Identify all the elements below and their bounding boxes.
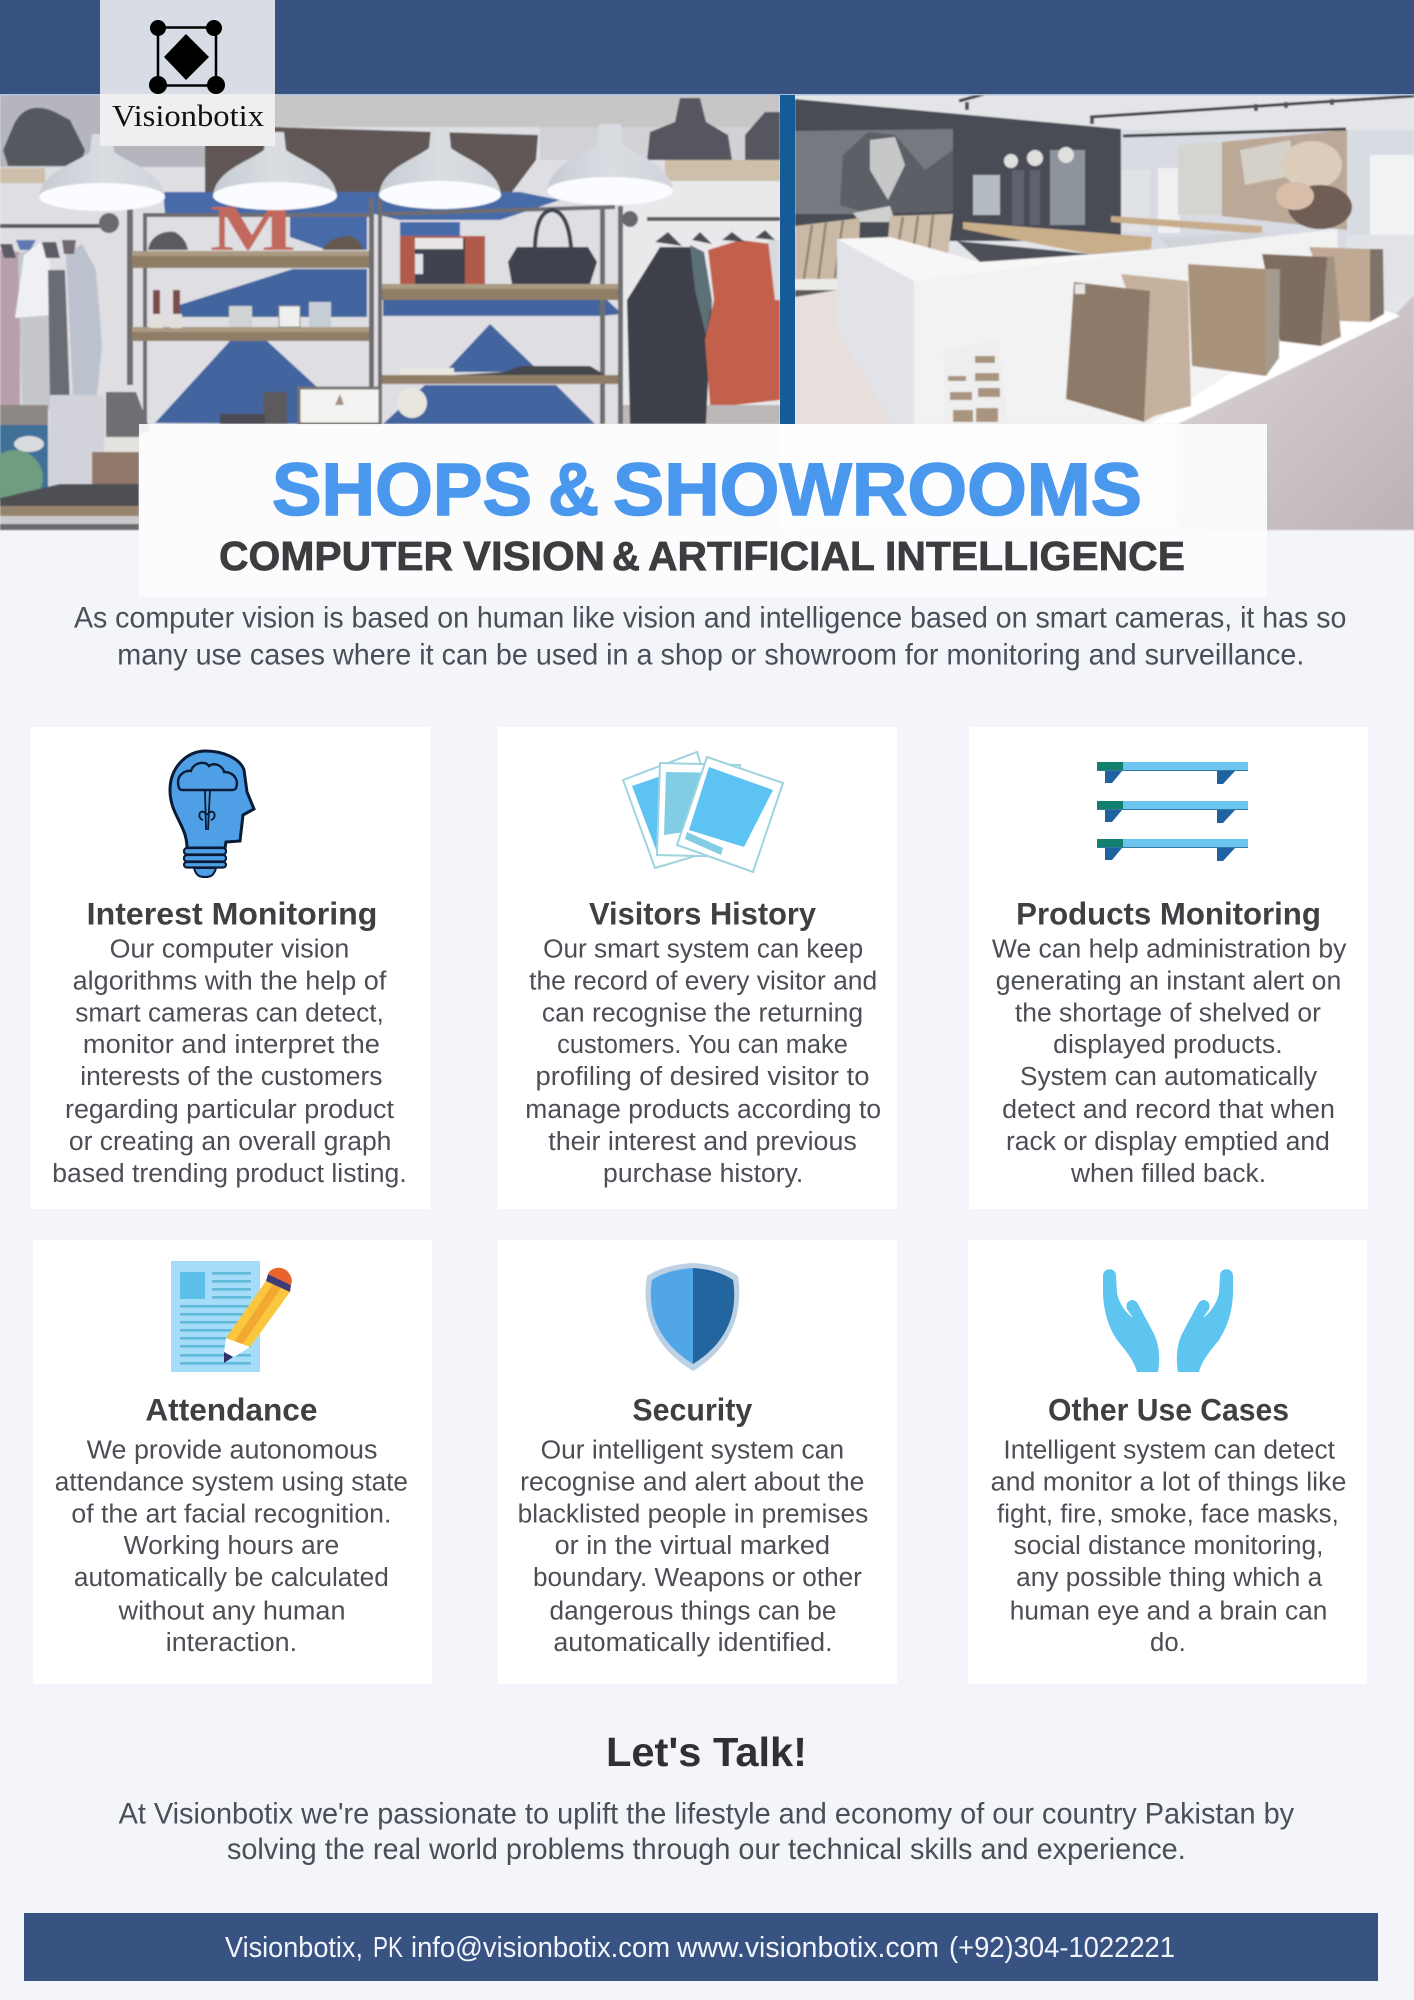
body text: any possible thing which a <box>1016 1562 1323 1592</box>
body text <box>55 1435 408 1657</box>
tables <box>957 241 1152 262</box>
body text: do. <box>1150 1627 1186 1657</box>
body text: their interest and previous <box>548 1126 857 1156</box>
intro text <box>74 601 1346 671</box>
body text: social distance monitoring, <box>1014 1530 1323 1560</box>
body text: the shortage of shelved or <box>1015 997 1321 1027</box>
body text: Our smart system can keep <box>543 934 863 964</box>
body text: monitor and interpret the <box>83 1029 380 1059</box>
contact details: www.visionbotix.com <box>676 1932 939 1964</box>
body text <box>518 1435 868 1657</box>
pendant lamps <box>39 124 673 197</box>
rail and coats right <box>647 217 780 221</box>
body text: dangerous things can be <box>550 1595 836 1625</box>
sign board <box>943 339 1008 422</box>
divider bar <box>780 95 795 424</box>
body text <box>525 934 881 1188</box>
subtitle: VISION <box>463 533 605 579</box>
white counter <box>837 239 914 424</box>
body text: interaction. <box>166 1627 297 1657</box>
panel: other use cases <box>968 1240 1367 1684</box>
heading: let's talk: Let's Talk! <box>606 1729 807 1775</box>
icon: open hands <box>1103 1269 1233 1372</box>
logo icon: diamond in frame <box>149 20 225 94</box>
bottles and objects <box>150 314 163 328</box>
subtitle <box>219 533 1185 579</box>
subtitle: ARTIFICIAL <box>648 533 875 579</box>
body text: purchase history. <box>603 1158 803 1188</box>
body text: Intelligent system can detect <box>1003 1435 1336 1465</box>
contact details: Visionbotix, <box>225 1932 363 1964</box>
bags and shelf on the top ledge <box>3 108 85 166</box>
contact details: PK <box>373 1932 404 1964</box>
icon: head light bulb <box>170 751 254 877</box>
wood sample racks behind counter <box>795 218 860 290</box>
icon: shield <box>646 1263 739 1371</box>
body text: Working hours are <box>124 1530 339 1560</box>
body text: smart cameras can detect, <box>75 997 384 1027</box>
body text: human eye and a brain can <box>1010 1595 1327 1625</box>
body text: interests of the customers <box>80 1061 382 1091</box>
body text: or creating an overall graph <box>69 1126 391 1156</box>
body text: recognise and alert about the <box>520 1466 864 1496</box>
body text: algorithms with the help of <box>73 965 387 995</box>
red duffel bag <box>400 236 485 284</box>
title <box>272 448 1142 531</box>
rail and hanging garments left <box>0 224 100 228</box>
panel: security <box>498 1240 897 1684</box>
panel: visitors history <box>498 727 897 1209</box>
icon: shelves <box>1097 762 1248 861</box>
contact details: info@visionbotix.com <box>411 1932 670 1964</box>
shelving frame <box>127 198 623 424</box>
decorative photo top edge <box>0 94 1414 96</box>
wood sample panels <box>1309 247 1370 322</box>
icon: document and pencil <box>171 1261 292 1372</box>
panel: attendance <box>33 1240 432 1684</box>
body text <box>52 934 407 1188</box>
title: SHOPS <box>272 448 532 531</box>
heading: Products Monitoring <box>1016 896 1321 931</box>
footer contact bar <box>24 1913 1378 1981</box>
logo wordmark: Visionbotix <box>112 98 265 133</box>
body text: generating an instant alert on <box>996 965 1341 995</box>
heading: Security <box>632 1392 753 1427</box>
body text: automatically be calculated <box>74 1562 389 1592</box>
body text: can recognise the returning <box>542 997 863 1027</box>
title: SHOWROOMS <box>613 448 1142 531</box>
heading: Other Use Cases <box>1048 1392 1289 1427</box>
body text: System can automatically <box>1020 1061 1318 1091</box>
letter M display: M <box>210 192 296 265</box>
body text <box>991 1435 1346 1657</box>
photo: flooring showroom <box>795 94 1414 530</box>
body text: attendance system using state <box>55 1466 408 1496</box>
intro text: As computer vision is based on human like vision and intelligence based on smart cameras, it has so <box>74 601 1346 634</box>
body text: customers. You can make <box>557 1029 848 1059</box>
body text: the record of every visitor and <box>529 965 877 995</box>
body text: Our computer vision <box>110 934 349 964</box>
panel: products monitoring <box>969 727 1368 1209</box>
body text: displayed products. <box>1053 1029 1283 1059</box>
heading: Interest Monitoring <box>87 896 377 931</box>
body text: based trending product listing. <box>52 1158 407 1188</box>
body text: We can help administration by <box>992 934 1347 964</box>
subtitle: INTELLIGENCE <box>885 533 1185 579</box>
photo: clothing shop <box>0 95 780 530</box>
heading: Visitors History <box>589 896 817 931</box>
body text: rack or display emptied and <box>1006 1126 1330 1156</box>
closing text <box>119 1797 1294 1866</box>
closing text: At Visionbotix we're passionate to uplift the lifestyle and economy of our country Pakistan by <box>119 1797 1294 1830</box>
title: & <box>548 448 599 531</box>
closing text: solving the real world problems through our technical skills and experience. <box>227 1833 1186 1866</box>
subtitle: COMPUTER <box>219 533 453 579</box>
icon: photo prints <box>623 752 783 872</box>
blue wall graphics <box>163 192 560 220</box>
top banner <box>0 0 1414 94</box>
panel: interest monitoring <box>30 727 430 1209</box>
body text: without any human <box>118 1595 346 1625</box>
body text: boundary. Weapons or other <box>533 1562 862 1592</box>
body text: or in the virtual marked <box>555 1530 830 1560</box>
body text: when filled back. <box>1070 1158 1266 1188</box>
body text: manage products according to <box>525 1094 881 1124</box>
logo <box>100 0 275 146</box>
body text: We provide autonomous <box>87 1435 377 1465</box>
body text: of the art facial recognition. <box>71 1498 391 1528</box>
subtitle: & <box>612 533 640 579</box>
body text: blacklisted people in premises <box>518 1498 868 1528</box>
heading: Attendance <box>145 1392 317 1427</box>
body text: profiling of desired visitor to <box>535 1061 870 1091</box>
body text: regarding particular product <box>65 1094 395 1124</box>
title backing panel <box>139 424 1267 597</box>
body text: fight, fire, smoke, face masks, <box>997 1498 1339 1528</box>
body text: detect and record that when <box>1002 1094 1335 1124</box>
body text <box>992 934 1347 1188</box>
body text: automatically identified. <box>553 1627 833 1657</box>
intro text: many use cases where it can be used in a shop or showroom for monitoring and surveillance. <box>117 638 1304 671</box>
floor <box>1177 295 1414 530</box>
contact details: (+92)304-1022221 <box>949 1932 1175 1964</box>
contact details <box>225 1932 1175 1964</box>
dark handbag <box>508 247 597 284</box>
body text: and monitor a lot of things like <box>991 1466 1346 1496</box>
body text: Our intelligent system can <box>541 1435 844 1465</box>
